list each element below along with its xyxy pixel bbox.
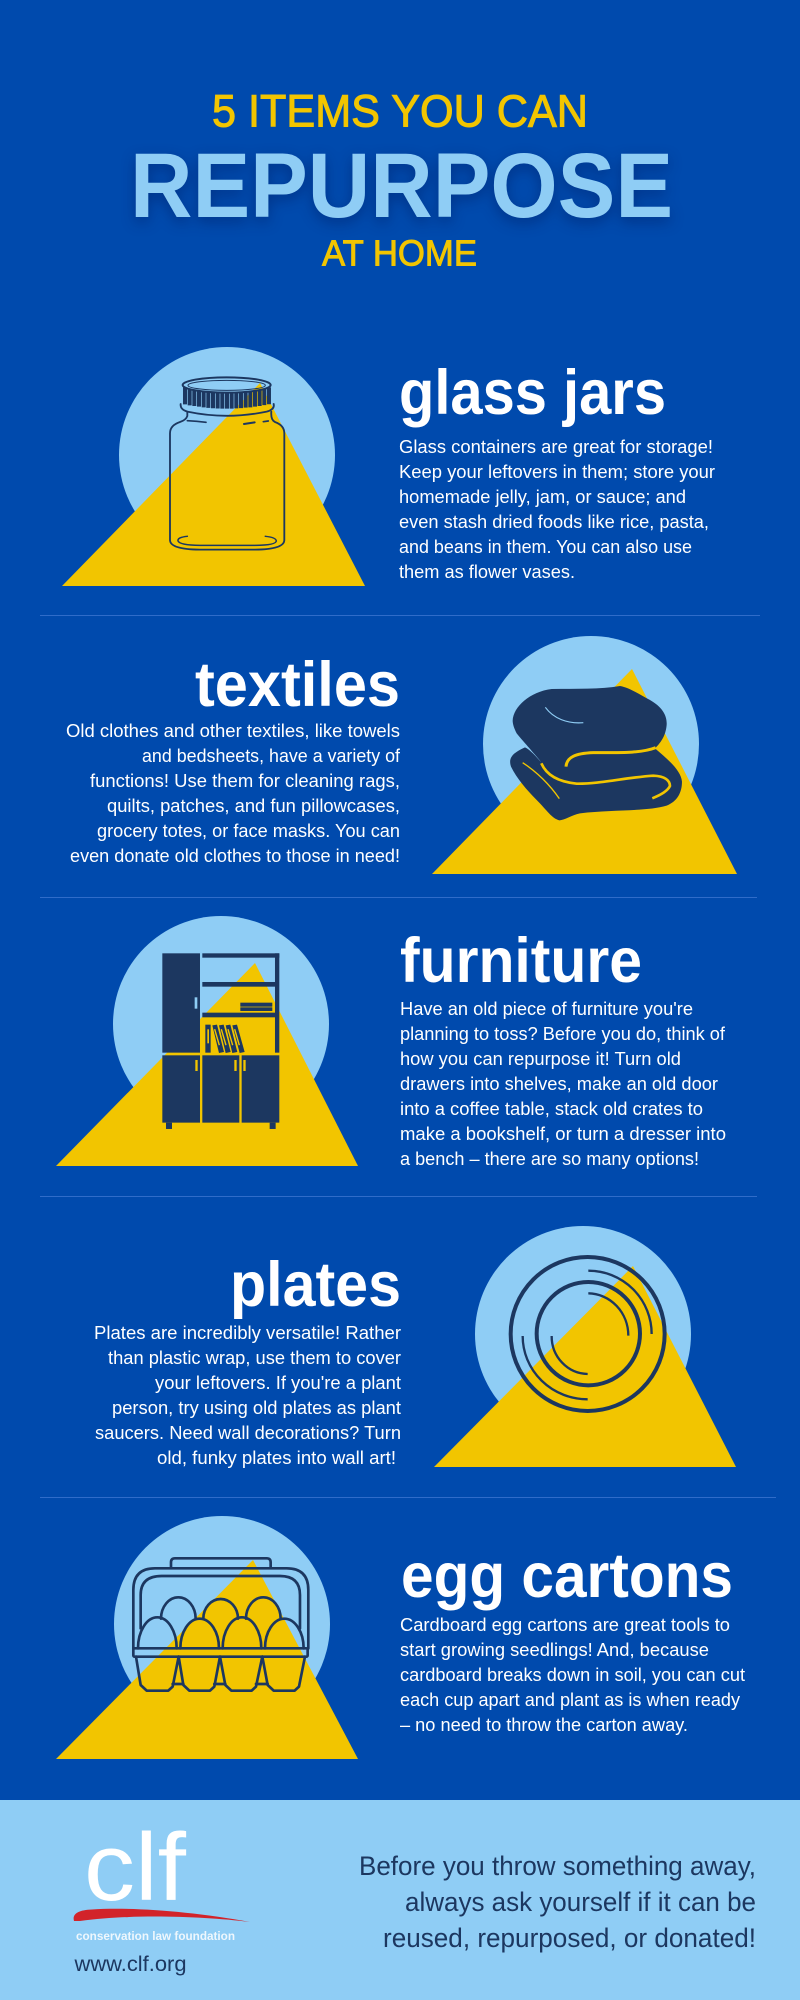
panel: textiles [66, 636, 737, 874]
text block: furniture: make a bookshelf, or turn a dresser into [400, 1123, 726, 1144]
panel: footer [0, 1800, 800, 2000]
text block: textiles: functions! Use them for cleaning rags, [90, 770, 400, 791]
heading: egg cartons: egg cartons [401, 1541, 733, 1611]
text block: plates: Plates are incredibly versatile! Rather [94, 1322, 401, 1343]
logo: clf: conservation law foundation [76, 1931, 235, 1943]
icon: towels [510, 686, 682, 820]
text block: furniture: how you can repurpose it! Turn old [400, 1048, 681, 1069]
text block: textiles: Old clothes and other textiles, like towels [66, 720, 400, 741]
logo: clf: clf [84, 1814, 186, 1921]
closing message [359, 1851, 756, 1953]
text block: furniture: drawers into shelves, make an old door [400, 1073, 718, 1094]
heading: glass jars: glass jars [399, 358, 666, 428]
text block: furniture: Have an old piece of furniture you're [400, 998, 693, 1019]
text block: egg cartons: each cup apart and plant as is when ready [400, 1689, 741, 1710]
text block: textiles: and bedsheets, have a variety of [142, 745, 401, 766]
illustration: egg carton [56, 1516, 358, 1759]
icon: plate [511, 1257, 665, 1411]
text block: glass jars: them as flower vases. [399, 561, 575, 582]
closing message: reused, repurposed, or donated! [383, 1923, 756, 1953]
title line: at home: AT HOME [322, 232, 477, 274]
heading: plates: plates [230, 1250, 401, 1320]
closing message: Before you throw something away, [359, 1851, 756, 1881]
text block: glass jars [399, 436, 715, 582]
panel: glass jars [62, 347, 715, 586]
text block: plates [94, 1322, 401, 1468]
illustration: folded textiles [432, 636, 737, 874]
text block: plates: old, funky plates into wall art! [157, 1447, 396, 1468]
panel: egg cartons [56, 1516, 745, 1759]
logo: clf [74, 1814, 250, 1943]
panel: furniture [56, 916, 726, 1169]
closing message: always ask yourself if it can be [405, 1887, 756, 1917]
text block: egg cartons [400, 1614, 745, 1735]
text block: plates: person, try using old plates as plant [112, 1397, 401, 1418]
website: www.clf.org [73, 1953, 186, 1976]
illustration: plate [434, 1226, 736, 1467]
text block: textiles: grocery totes, or face masks. You can [97, 820, 400, 841]
text block: glass jars: homemade jelly, jam, or sauce; and [399, 486, 686, 507]
illustration: glass jar [62, 347, 365, 586]
text block: plates: saucers. Need wall decorations? Turn [95, 1422, 401, 1443]
text block: furniture [400, 998, 726, 1169]
title line: repurpose: REPURPOSE [130, 135, 673, 237]
text block: furniture: planning to toss? Before you do, think of [400, 1023, 726, 1044]
text block: furniture: into a coffee table, stack old crates to [400, 1098, 703, 1119]
text block: furniture: a bench – there are so many options! [400, 1148, 699, 1169]
text block: glass jars: even stash dried foods like rice, pasta, [399, 511, 709, 532]
text block: plates: than plastic wrap, use them to cover [108, 1347, 401, 1368]
text block: glass jars: Glass containers are great for storage! [399, 436, 713, 457]
illustration: furniture [56, 916, 358, 1166]
icon: jar [170, 377, 284, 550]
text block: glass jars: and beans in them. You can also use [399, 536, 692, 557]
logo swoosh [74, 1909, 250, 1922]
title [130, 86, 673, 274]
title line: 5 items you can: 5 ITEMS YOU CAN [212, 86, 588, 136]
text block: textiles: quilts, patches, and fun pillowcases, [107, 795, 400, 816]
text block: egg cartons: Cardboard egg cartons are great tools to [400, 1614, 730, 1635]
text block: plates: your leftovers. If you're a plant [155, 1372, 401, 1393]
heading: furniture: furniture [400, 926, 642, 996]
text block: egg cartons: cardboard breaks down in soil, you can cut [400, 1664, 745, 1685]
text block: glass jars: Keep your leftovers in them; store your [399, 461, 715, 482]
icon: egg carton [133, 1558, 308, 1691]
heading: textiles: textiles [195, 650, 400, 720]
panel: plates [94, 1226, 736, 1468]
text block: egg cartons: – no need to throw the carton away. [400, 1714, 688, 1735]
text block: textiles: even donate old clothes to those in need! [70, 845, 400, 866]
text block: textiles [66, 720, 401, 866]
icon: cabinet [162, 953, 279, 1129]
text block: egg cartons: start growing seedlings! And, because [400, 1639, 709, 1660]
